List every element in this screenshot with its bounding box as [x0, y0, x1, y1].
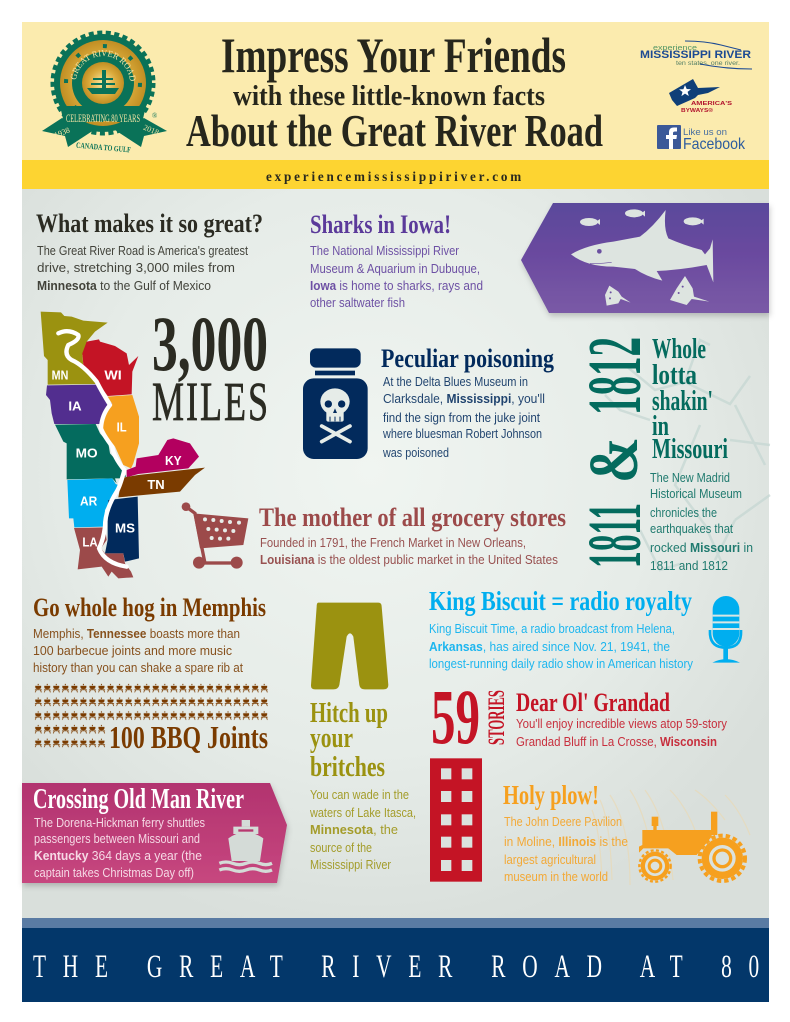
panel: holy plow: in Moline, Illinois is the: [504, 834, 628, 849]
icon: shark banner: [521, 203, 769, 313]
panel: holy plow: [503, 780, 750, 885]
panel: what makes it so great: Minnesota to the Gulf of Mexico: [37, 278, 211, 293]
map: river states: LA: [82, 536, 98, 550]
panel: king biscuit: longest-running daily radio show in American history: [429, 656, 693, 671]
logo: Great River Road 80 years seal: 2018: [142, 123, 160, 137]
map: river states: TN: [147, 478, 165, 492]
panel: sharks in Iowa: Sharks in Iowa!: [310, 210, 451, 239]
rotated years: &: [576, 437, 653, 483]
map: river states: IL: [117, 421, 127, 435]
panel: sharks in Iowa: other saltwater fish: [310, 295, 405, 310]
panel: whole lotta shakin': Missouri: [652, 433, 728, 465]
heading: 3,000 miles: 3,000: [152, 300, 268, 387]
panel: holy plow: Holy plow!: [503, 780, 599, 810]
panel: crossing old man river: The Dorena-Hickman ferry shuttles: [34, 815, 205, 830]
panel: hitch up your britches: [309, 603, 416, 872]
panel: mother of all grocery stores: Founded in 1791, the French Market in New Orleans,: [260, 535, 526, 550]
url strip: experiencemississippiriver.com: [266, 170, 524, 185]
logo: Great River Road 80 years seal: ®: [152, 112, 158, 120]
map: river states: MN: [52, 368, 68, 382]
panel: go whole hog: Memphis, Tennessee boasts more than: [33, 626, 240, 641]
icon: pants: [311, 603, 388, 689]
logo: Experience Mississippi River: experience: [653, 45, 697, 52]
panel: mother of all grocery stores: [182, 502, 566, 569]
panel: crossing old man river: Kentucky 364 days a year (the: [34, 848, 202, 863]
panel: king biscuit: [429, 586, 741, 671]
panel: peculiar poisoning: Peculiar poisoning: [381, 344, 554, 373]
logo: Great River Road 80 years seal: 1938: [53, 126, 71, 140]
panel: peculiar poisoning: where bluesman Robert Johnson: [382, 426, 542, 441]
panel: peculiar poisoning: find the sign from the juke joint: [383, 410, 540, 425]
url strip: [22, 160, 769, 189]
icon: microphone: [710, 596, 741, 663]
panel: crossing old man river: passengers between Missouri and: [34, 831, 200, 846]
map: river states: IA: [68, 400, 82, 414]
icon: poison bottle: [303, 348, 368, 459]
page background: [22, 189, 769, 918]
logo: America's Byways: [669, 79, 732, 114]
icon: building: [430, 758, 482, 882]
panel: what makes it so great: drive, stretching 3,000 miles from: [37, 260, 235, 275]
title: with these little-known facts: [233, 80, 545, 112]
heading: 3,000 miles: MILES: [152, 371, 270, 432]
panel: king biscuit: King Biscuit Time, a radio broadcast from Helena,: [429, 621, 675, 636]
panel: crossing old man river: [22, 783, 287, 883]
rotated years: [573, 337, 657, 568]
panel: dear ol' grandad: STORIES: [484, 690, 509, 745]
map: river states: MO: [76, 447, 98, 461]
panel: sharks in Iowa: Museum & Aquarium in Dubuque,: [310, 261, 480, 276]
panel: sharks in Iowa: Iowa is home to sharks, rays and: [310, 278, 483, 293]
panel: king biscuit: Arkansas, has aired since Nov. 21, 1941, the: [429, 639, 670, 654]
panel: peculiar poisoning: Clarksdale, Mississippi, you'll: [383, 391, 545, 406]
panel: whole lotta shakin': lotta: [652, 359, 697, 391]
panel: whole lotta shakin': chronicles the: [650, 505, 717, 520]
panel: dear ol' grandad: [430, 673, 727, 882]
icon: ferry: [219, 820, 272, 871]
panel: go whole hog: history than you can shake a spare rib at: [33, 660, 243, 675]
panel: hitch up your britches: source of the: [310, 840, 372, 855]
logo: Great River Road 80 years seal: GREAT RIVER ROAD: [70, 50, 136, 81]
title: Impress Your Friends: [221, 27, 566, 83]
panel: hitch up your britches: You can wade in the: [310, 787, 409, 802]
panel: hitch up your britches: waters of Lake Itasca,: [309, 805, 416, 820]
rotated years: 1811: [573, 503, 657, 568]
panel: whole lotta shakin': [573, 333, 770, 573]
logo: Facebook: Like us on: [683, 127, 727, 138]
map: river states: KY: [165, 454, 182, 468]
panel: king biscuit: King Biscuit = radio royalty: [429, 586, 692, 616]
panel: dear ol' grandad: Grandad Bluff in La Crosse, Wisconsin: [516, 734, 717, 749]
panel: whole lotta shakin': earthquakes that: [650, 521, 733, 536]
panel: dear ol' grandad: You'll enjoy incredible views atop 59-story: [516, 716, 727, 731]
rotated years: 1812: [573, 337, 657, 415]
panel: holy plow: largest agricultural: [504, 852, 596, 867]
logo: Experience Mississippi River: MISSISSIPPI RIVER: [640, 49, 751, 61]
title: [186, 27, 603, 156]
logo: Experience Mississippi River: ten states. one river.: [676, 61, 740, 67]
panel: header: [22, 22, 769, 189]
panel: mother of all grocery stores: Louisiana is the oldest public market in the United States: [260, 552, 558, 567]
panel: what makes it so great: What makes it so great?: [36, 209, 263, 238]
panel: hitch up your britches: your: [310, 722, 353, 754]
title: About the Great River Road: [186, 105, 603, 156]
panel: crossing old man river: captain takes Christmas Day off): [34, 865, 194, 880]
panel: hitch up your britches: britches: [310, 751, 385, 783]
panel: hitch up your britches: Mississippi River: [310, 857, 392, 872]
panel: go whole hog: [33, 593, 269, 755]
panel: go whole hog: Go whole hog in Memphis: [33, 593, 266, 622]
map: river states: MS: [115, 522, 135, 536]
panel: sharks in Iowa: [310, 203, 769, 313]
panel: mother of all grocery stores: The mother of all grocery stores: [259, 503, 566, 532]
panel: whole lotta shakin': rocked Missouri in: [650, 540, 753, 555]
panel: holy plow: The John Deere Pavilion: [504, 814, 622, 829]
map: river states: WI: [104, 368, 122, 382]
earthquake cracks: [605, 340, 770, 570]
logo: America's Byways: AMERICA'S: [691, 101, 732, 107]
panel: whole lotta shakin': Historical Museum: [650, 486, 742, 501]
footer banner: [22, 918, 776, 1002]
logo: Great River Road 80 years seal: [42, 30, 167, 154]
logo: Great River Road 80 years seal: CELEBRATING 80 YEARS: [66, 111, 140, 125]
panel: hitch up your britches: Minnesota, the: [310, 822, 398, 837]
panel: holy plow: museum in the world: [504, 869, 608, 884]
panel: whole lotta shakin': Whole: [652, 333, 706, 365]
panel: whole lotta shakin': 1811 and 1812: [650, 558, 728, 573]
panel: go whole hog: 100 barbecue joints and more music: [33, 643, 232, 658]
panel: sharks in Iowa: The National Mississippi River: [310, 243, 460, 258]
panel: peculiar poisoning: [303, 344, 554, 460]
panel: whole lotta shakin': The New Madrid: [650, 470, 730, 485]
logo: Great River Road 80 years seal: CANADA TO GULF: [76, 141, 131, 154]
panel: what makes it so great: The Great River Road is America's greatest: [37, 243, 248, 258]
icon: shopping cart: [182, 502, 248, 569]
panel: dear ol' grandad: 59: [431, 673, 480, 760]
panel: peculiar poisoning: was poisoned: [382, 445, 449, 460]
panel: peculiar poisoning: At the Delta Blues Museum in: [383, 374, 528, 389]
logo: Facebook: Facebook: [683, 136, 746, 153]
panel: crossing old man river: Crossing Old Man River: [33, 784, 244, 815]
logo: America's Byways: BYWAYS®: [681, 107, 713, 114]
panel: what makes it so great: [36, 209, 263, 293]
wheat field streaks: [592, 790, 750, 885]
panel: whole lotta shakin': shakin': [652, 385, 713, 417]
icon: grills pictogram: [34, 683, 269, 751]
panel: go whole hog: 100 BBQ Joints: [109, 719, 268, 755]
heading: 3,000 miles: [152, 300, 270, 432]
panel: dear ol' grandad: Dear Ol' Grandad: [516, 688, 670, 717]
logo: Experience Mississippi River: [640, 41, 752, 69]
icon: tractor: [639, 812, 745, 882]
logo: Facebook: [657, 125, 746, 153]
map: river states: AR: [80, 495, 97, 509]
panel: hitch up your britches: Hitch up: [310, 697, 388, 729]
panel: whole lotta shakin': in: [652, 410, 669, 442]
map: river states: [41, 312, 205, 578]
